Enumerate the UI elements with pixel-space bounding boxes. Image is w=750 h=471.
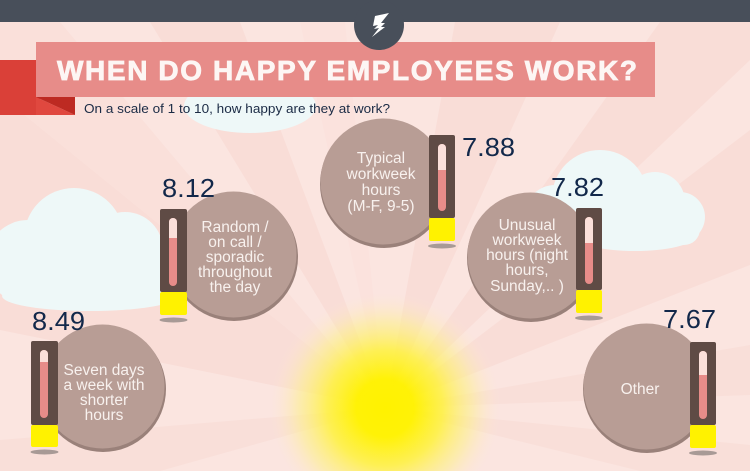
item: Seven days xyxy=(30,306,166,454)
cloud: right xyxy=(525,150,705,251)
item: Unusual: 7.82 xyxy=(551,172,604,202)
item: Unusual: hours, xyxy=(505,262,549,279)
item: Typical: (M-F, 9-5) xyxy=(347,198,415,215)
item: Typical xyxy=(320,118,515,248)
item: Other: Other xyxy=(621,381,659,398)
item: Seven days: a week with xyxy=(64,377,144,394)
item: Seven days: Seven days xyxy=(64,362,145,379)
item: Typical: workweek xyxy=(346,166,416,183)
item: Other xyxy=(583,304,717,456)
item: Random: sporadic xyxy=(206,249,265,266)
title banner: WHEN DO HAPPY EMPLOYEES WORK? xyxy=(57,55,637,86)
item: Unusual: Sunday,.. ) xyxy=(490,278,564,295)
item: Unusual xyxy=(467,172,604,322)
cloud: top behind subtitle xyxy=(184,79,316,133)
cloud: left xyxy=(0,188,180,311)
subtitle: On a scale of 1 to 10, how happy are they at work? xyxy=(84,101,390,116)
item: Typical: 7.88 xyxy=(462,132,515,162)
item: Typical: hours xyxy=(362,182,401,199)
item: Unusual: hours (night xyxy=(486,247,569,264)
item: Random: 8.12 xyxy=(162,173,215,203)
ribbon fold xyxy=(0,60,75,115)
item: Random: on call / xyxy=(208,234,262,251)
item: Random: throughout xyxy=(198,264,273,281)
item: Random: Random / xyxy=(201,219,269,236)
item: Seven days: hours xyxy=(85,407,124,424)
item: Seven days: shorter xyxy=(80,392,128,409)
title banner xyxy=(36,42,655,97)
item: Other: 7.67 xyxy=(663,304,716,334)
top bar xyxy=(0,0,750,22)
item: Unusual: workweek xyxy=(492,232,562,249)
item: Seven days: 8.49 xyxy=(32,306,85,336)
item: Unusual: Unusual xyxy=(499,217,555,234)
item: Typical: Typical xyxy=(357,150,405,167)
sun xyxy=(269,292,501,471)
item: Random: the day xyxy=(210,279,261,296)
icon: lightning badge xyxy=(354,0,404,50)
item: Random xyxy=(160,173,298,322)
